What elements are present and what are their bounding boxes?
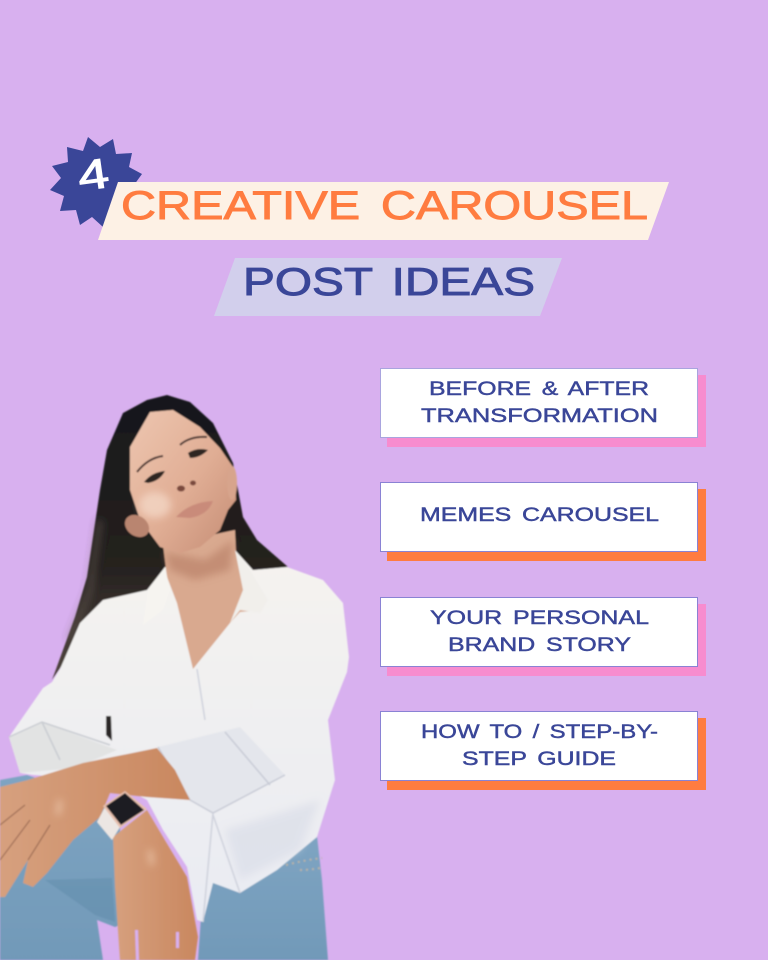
title banner: creative carousel bbox=[98, 182, 669, 240]
subtitle banner: post ideas: POST IDEAS bbox=[243, 261, 535, 304]
jeans knee shadow bbox=[45, 878, 115, 922]
card: your personal brand story bbox=[380, 598, 706, 676]
hair highlight bbox=[70, 520, 100, 640]
right collar bbox=[230, 550, 268, 623]
eyes bbox=[144, 449, 208, 483]
left sleeve fold lines bbox=[9, 722, 110, 760]
eyebrows bbox=[137, 437, 207, 472]
card: before and after transformation: TRANSFORMATION bbox=[421, 405, 658, 427]
dark gap under sleeve bbox=[106, 716, 112, 741]
right sleeve cuff bbox=[158, 727, 285, 813]
card: memes carousel bbox=[380, 482, 706, 561]
card: memes carousel: MEMES CAROUSEL bbox=[420, 504, 659, 526]
watch screen bbox=[106, 793, 144, 825]
hand finger gaps bbox=[135, 930, 179, 960]
cuff fold line bbox=[158, 732, 285, 813]
neck shadow bbox=[165, 540, 233, 580]
hair bbox=[52, 395, 288, 680]
shirt bbox=[9, 550, 349, 922]
right ear edge bbox=[227, 466, 237, 500]
photo: woman in white shirt and jeans bbox=[0, 395, 349, 960]
badge: number 4 starburst: 4 bbox=[75, 149, 112, 200]
watch band bbox=[97, 807, 120, 840]
jeans studs bbox=[286, 858, 322, 870]
cheek highlight bbox=[139, 492, 171, 518]
card: how to step-by-step guide: STEP GUIDE bbox=[462, 748, 616, 770]
card: before and after transformation bbox=[380, 368, 706, 447]
card: before and after transformation: BEFORE & AFTER bbox=[429, 378, 649, 400]
card: your personal brand story: YOUR PERSONAL bbox=[430, 607, 649, 629]
watch case bbox=[103, 791, 147, 828]
left forearm and hand bbox=[0, 748, 190, 897]
rolled left cuff bbox=[9, 722, 117, 773]
lips bbox=[176, 501, 213, 518]
right jeans bbox=[198, 836, 328, 960]
face bbox=[130, 410, 236, 553]
knuckle highlights bbox=[58, 800, 152, 865]
left collar bbox=[143, 567, 170, 625]
title banner: creative carousel: CREATIVE CAROUSEL bbox=[121, 184, 648, 228]
badge: number 4 starburst bbox=[50, 137, 142, 227]
card: how to step-by-step guide: HOW TO / STEP-BY- bbox=[421, 721, 658, 743]
nose bbox=[177, 480, 196, 492]
left jeans bbox=[0, 775, 120, 960]
ear bbox=[121, 510, 153, 542]
card: how to step-by-step guide bbox=[380, 712, 706, 790]
finger gaps bbox=[0, 805, 50, 860]
shirt body shade bbox=[225, 800, 320, 880]
hanging hand bbox=[113, 810, 198, 960]
shirt placket bbox=[197, 669, 240, 922]
subtitle banner: post ideas bbox=[214, 258, 562, 316]
neck and chest bbox=[163, 530, 262, 669]
card: your personal brand story: BRAND STORY bbox=[448, 634, 631, 656]
